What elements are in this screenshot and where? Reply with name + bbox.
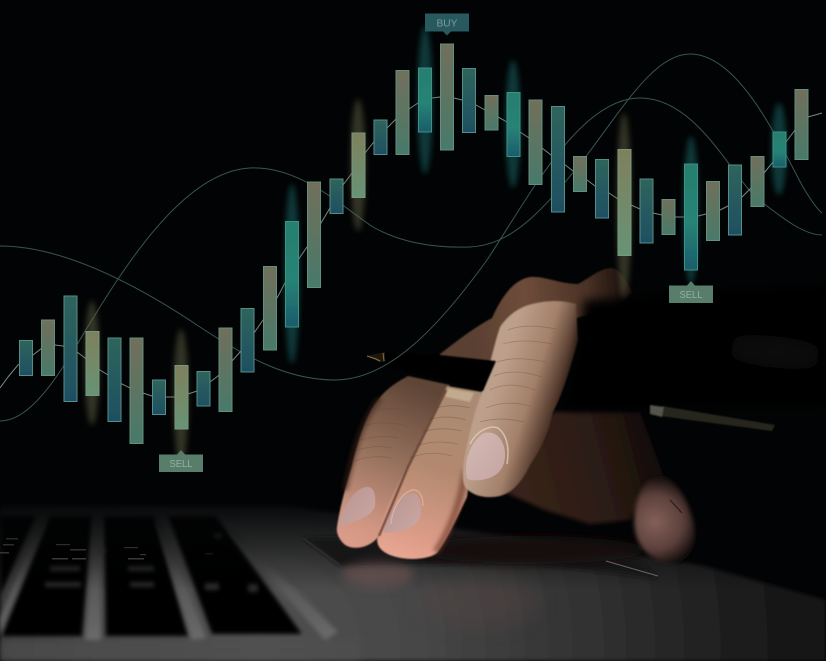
- trackpad: [303, 536, 658, 627]
- pen: [367, 352, 775, 431]
- palm and back of hand: [500, 412, 665, 524]
- seam between ring and middle fingers: [379, 390, 446, 536]
- key highlights: [0, 538, 213, 560]
- shade on middle finger right side: [436, 470, 466, 552]
- candles: [20, 44, 808, 444]
- top fade: [0, 495, 826, 590]
- middle finger nail: [384, 493, 421, 533]
- label: sell left: SELL: [170, 458, 193, 470]
- pen clip: [660, 406, 775, 431]
- thumb: [634, 476, 695, 563]
- candle glows: [84, 26, 786, 465]
- ring finger: [337, 376, 450, 548]
- keyboard: [0, 495, 826, 640]
- label: sell right: [669, 281, 713, 303]
- chart: [0, 14, 822, 472]
- fingertip shadow: [415, 536, 645, 564]
- trend curve one: [0, 54, 822, 421]
- label: buy: [425, 14, 469, 36]
- faint sleeve highlight: [724, 338, 826, 366]
- ring finger edge shade: [345, 398, 380, 490]
- keyboard dividers: [0, 520, 338, 640]
- index finger nail: [466, 432, 505, 480]
- ring finger nail: [338, 487, 375, 527]
- fingertip reflection: [342, 561, 414, 587]
- upper knuckles: [440, 268, 632, 362]
- price line: [0, 97, 822, 397]
- label: sell left: [159, 450, 203, 472]
- keyboard wells: [0, 516, 302, 636]
- hand: [337, 268, 826, 563]
- hand shadow: [565, 285, 826, 408]
- middle finger: [377, 386, 482, 559]
- trend curve two: [0, 98, 822, 380]
- label: sell right: SELL: [680, 289, 703, 301]
- index finger: [463, 301, 578, 497]
- label: buy: BUY: [436, 18, 458, 30]
- laptop surface: [0, 505, 826, 661]
